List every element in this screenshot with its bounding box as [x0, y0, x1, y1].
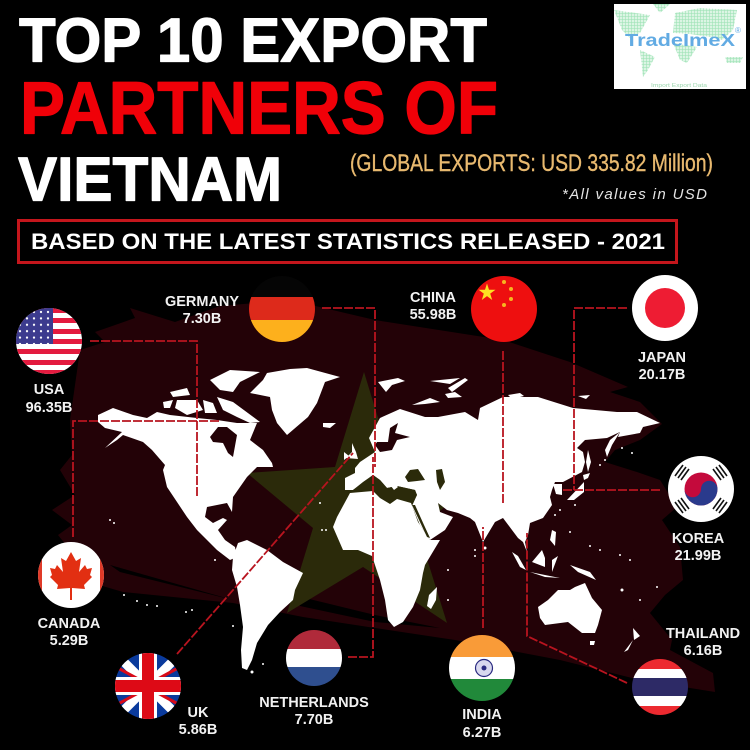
label: China [410, 290, 456, 323]
New Zealand [624, 628, 640, 652]
Arctic islands [163, 370, 260, 423]
title: VIETNAM [18, 146, 282, 214]
flag: USA [16, 308, 82, 375]
label: Korea: KOREA [672, 531, 725, 547]
label: Germany [165, 294, 239, 327]
label: Thailand: THAILAND [666, 626, 740, 642]
Black Sea [405, 469, 425, 482]
small island dots [109, 447, 658, 674]
label: India: INDIA [462, 707, 502, 723]
label: USA: USA [34, 382, 65, 398]
Baltic Sea [375, 423, 410, 452]
connector: UK [177, 453, 353, 654]
connector: Netherlands [348, 457, 373, 657]
brush background [48, 300, 715, 692]
connector: China [502, 351, 504, 505]
label: Netherlands: 7.70B [295, 712, 333, 728]
label: Thailand: 6.16B [684, 643, 722, 659]
label: India: 6.27B [463, 725, 501, 741]
flag: UK [115, 653, 181, 719]
Madagascar [427, 587, 437, 609]
label: Japan: JAPAN [638, 350, 686, 366]
label: Thailand [666, 626, 740, 659]
label: Germany: GERMANY [165, 294, 239, 310]
label: Canada: CANADA [38, 616, 101, 632]
logo: TradeImeX: Import Export Data [651, 83, 707, 89]
connector: Thailand [527, 533, 627, 683]
label: Canada [38, 616, 101, 649]
black brush streak [110, 565, 440, 628]
Mediterranean Sea [350, 475, 417, 503]
connector: Korea [563, 489, 660, 491]
flag: Thailand [632, 659, 688, 716]
Caspian Sea [436, 469, 445, 490]
label: UK [179, 705, 217, 738]
flag: Germany [249, 297, 315, 342]
flag: Japan [632, 275, 698, 341]
title [18, 6, 498, 214]
connector: Germany [322, 308, 375, 467]
Eurasia [345, 397, 660, 552]
label: Japan [638, 350, 686, 383]
title: TOP 10 EXPORT [19, 6, 487, 76]
label: Korea: 21.99B [675, 548, 721, 564]
banner: BASED ON THE LATEST STATISTICS RELEASED - 2021 [31, 229, 665, 254]
logo: TradeImeX: TradeImeX [625, 30, 735, 50]
label: Korea [672, 531, 725, 564]
connector: USA [90, 341, 197, 497]
UK [344, 443, 358, 460]
label: Germany: 7.30B [183, 311, 221, 327]
connector: Japan [574, 308, 627, 490]
Australia [538, 583, 602, 645]
label: UK: 5.86B [179, 722, 217, 738]
Vietnam star [247, 372, 485, 623]
note: all values in USD: *All values in USD [562, 186, 707, 203]
label: USA [26, 382, 72, 416]
label: Japan: 20.17B [639, 367, 685, 383]
flag: Netherlands [286, 630, 342, 686]
label: Netherlands [259, 695, 369, 728]
connector: Canada [73, 421, 220, 537]
flag: China [471, 276, 537, 342]
South America [232, 540, 303, 670]
flag: Canada [38, 542, 104, 608]
label: China: CHINA [410, 290, 456, 306]
label: India [462, 707, 502, 741]
title: PARTNERS OF [20, 66, 498, 150]
logo: TradeImeX: ® [735, 26, 741, 35]
logo: TradeImeX [614, 4, 746, 89]
label: China: 55.98B [410, 307, 456, 323]
banner [18, 220, 676, 262]
Greenland [250, 368, 340, 435]
Hudson Bay [210, 427, 237, 457]
label: Netherlands: NETHERLANDS [259, 695, 369, 711]
Africa [333, 491, 440, 627]
label: UK: UK [188, 705, 209, 721]
Italy [380, 472, 398, 490]
label: Canada: 5.29B [50, 633, 88, 649]
flag: India [449, 635, 515, 701]
North America [98, 408, 273, 560]
Red Sea [412, 505, 430, 538]
label: USA: 96.35B [26, 400, 72, 416]
world map [48, 300, 715, 692]
flag: Korea [668, 456, 734, 522]
connector: India [482, 527, 484, 628]
Asian islands [378, 378, 620, 580]
